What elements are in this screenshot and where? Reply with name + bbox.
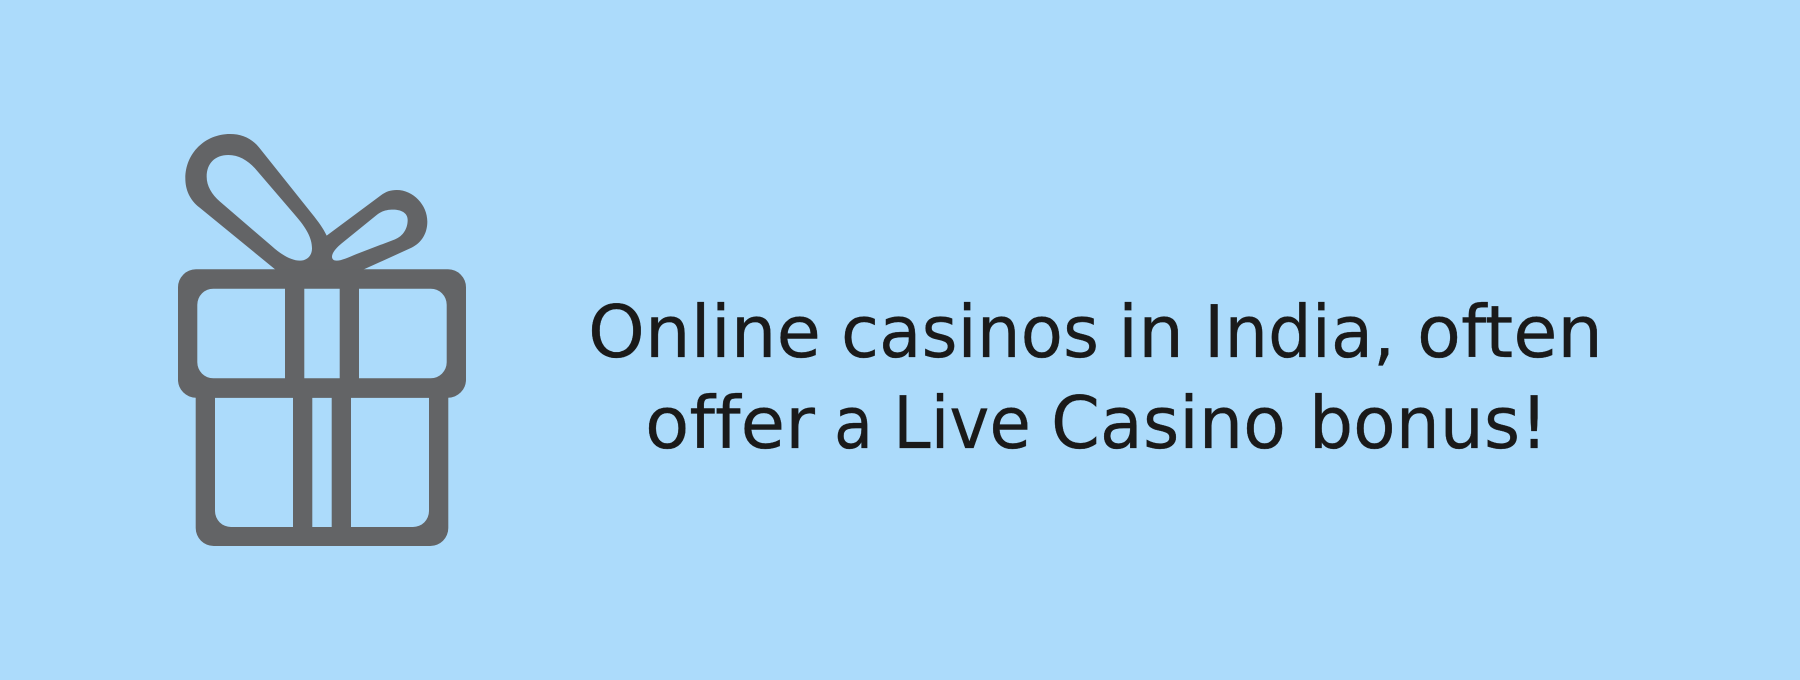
headline line 2: offer xyxy=(645,381,815,465)
headline line 2: Live xyxy=(893,381,1031,465)
headline line 1: casinos xyxy=(841,290,1099,374)
headline text xyxy=(588,290,1603,465)
headline line 2: Casino xyxy=(1051,381,1286,465)
headline line 1: in xyxy=(1118,290,1184,374)
headline line 2 xyxy=(645,381,1548,465)
headline line 2: a xyxy=(834,381,873,465)
icon: box base xyxy=(196,397,448,546)
icon: ribbon bow xyxy=(185,134,427,271)
headline line 1: often xyxy=(1417,290,1603,374)
headline line 1 xyxy=(588,290,1603,374)
icon: gift box xyxy=(178,134,466,546)
headline line 1: India, xyxy=(1204,290,1395,374)
headline line 1: Online xyxy=(588,290,821,374)
icon: box lid xyxy=(178,269,466,398)
headline line 2: bonus! xyxy=(1309,381,1548,465)
